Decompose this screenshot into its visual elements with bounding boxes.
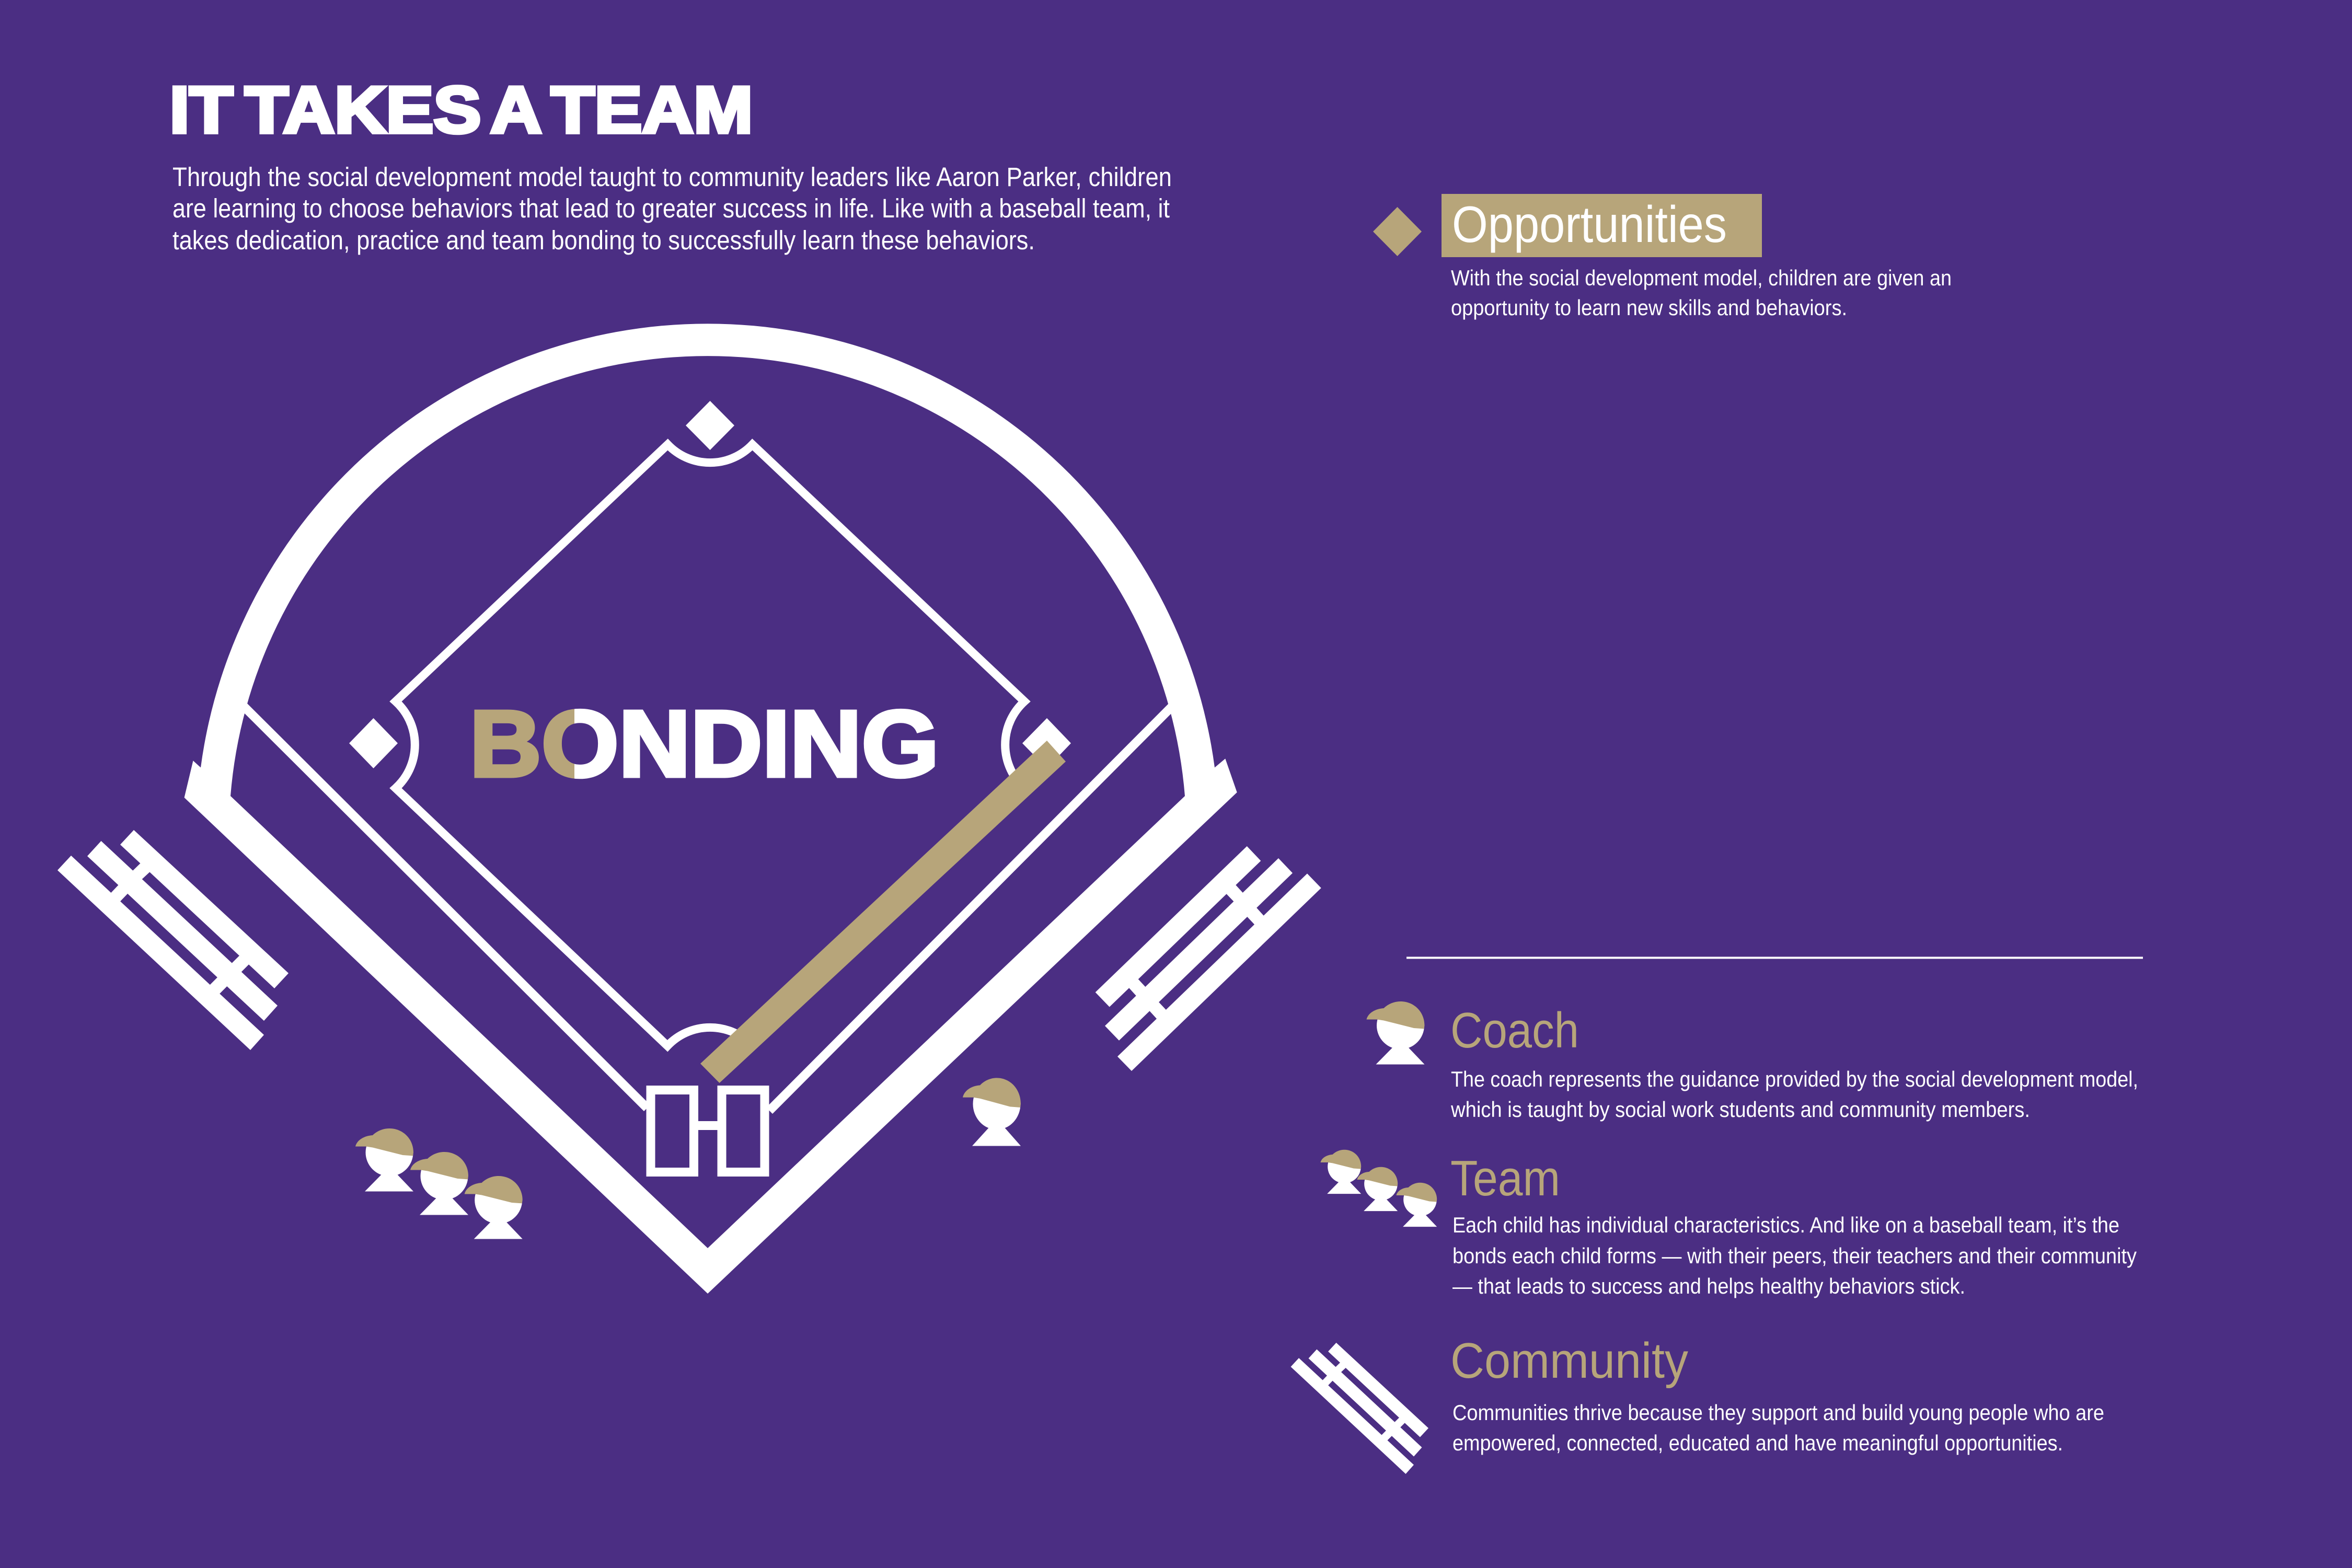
first base [1022, 718, 1071, 768]
coach heading: Coach [1450, 1002, 1579, 1058]
baseball field [185, 324, 1237, 1294]
team text: Each child has individual characteristics. And like on a baseball team, it’s the [1452, 1213, 2119, 1237]
icon: coach [1366, 1001, 1425, 1064]
opportunities heading: Opportunities [1452, 195, 1727, 253]
intro text: Through the social development model taught to community leaders like Aaron Parker, children [172, 162, 1172, 192]
team players on field [355, 1128, 523, 1239]
gold bat [700, 741, 1066, 1083]
opportunities text: With the social development model, children are given an [1451, 266, 1952, 290]
right foul line [769, 707, 1172, 1111]
intro text [172, 162, 1172, 255]
icon: team [1320, 1150, 1437, 1227]
right bleachers [1096, 846, 1321, 1071]
left bleachers [57, 830, 289, 1050]
home plate batter boxes [651, 1090, 765, 1172]
intro text: takes dedication, practice and team bonding to successfully learn these behaviors. [172, 225, 1035, 255]
community heading: Community [1450, 1333, 1688, 1389]
community text: Communities thrive because they support and build young people who are [1452, 1400, 2104, 1425]
icon: opportunities diamond [1373, 207, 1422, 256]
coach on field [963, 1078, 1021, 1146]
community text: empowered, connected, educated and have meaningful opportunities. [1452, 1431, 2063, 1455]
bonding label: BONDING [469, 691, 939, 797]
coach text [1450, 1067, 2138, 1122]
title: IT TAKES A TEAM [169, 73, 753, 146]
icon: community bleachers [1291, 1343, 1428, 1474]
intro text: are learning to choose behaviors that lead to greater success in life. Like with a baseball team, it [172, 193, 1170, 223]
community text [1452, 1400, 2104, 1455]
team text: — that leads to success and helps healthy behaviors stick. [1452, 1274, 1965, 1298]
infield outline [396, 444, 1024, 1046]
third base [349, 718, 398, 768]
outfield fence [185, 324, 1237, 1294]
team heading: Team [1450, 1150, 1560, 1206]
team text: bonds each child forms — with their peers, their teachers and their community [1452, 1243, 2137, 1268]
team text [1452, 1213, 2137, 1298]
coach text: which is taught by social work students and community members. [1450, 1097, 2030, 1122]
opportunities text [1451, 266, 1952, 320]
left foul line [243, 706, 647, 1108]
coach text: The coach represents the guidance provided by the social development model, [1451, 1067, 2138, 1091]
opportunities text: opportunity to learn new skills and behaviors. [1451, 295, 1847, 320]
second base [686, 401, 734, 450]
